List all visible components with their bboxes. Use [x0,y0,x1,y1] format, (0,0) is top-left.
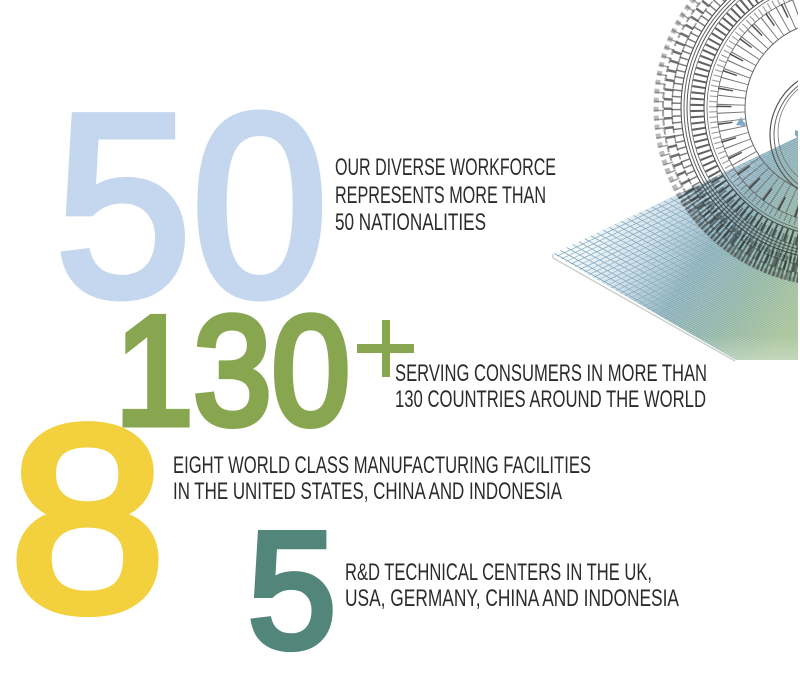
stat: 130+ countries [115,284,707,457]
description: workforce: 50 NATIONALITIES [335,209,486,236]
description: workforce: REPRESENTS MORE THAN [335,182,546,209]
number 8: 8 [9,371,166,666]
tire wireframe [656,0,800,284]
number 130: 130 [115,284,350,457]
description: workforce [335,154,556,236]
number 5: 5 [248,498,336,679]
description: workforce: OUR DIVERSE WORKFORCE [335,154,556,181]
stat: 50 nationalities [55,61,556,351]
mesh plane [553,137,798,361]
description: facilities: EIGHT WORLD CLASS MANUFACTURING FACILITIES [173,452,591,479]
stat: 8 facilities [9,371,591,666]
description: countries [395,360,707,413]
number 50: 50 [55,61,328,351]
illustration: tire on mesh plane [553,0,800,361]
description: R&D centers: USA, GERMANY, CHINA AND INDONESIA [345,585,679,612]
plus sign [357,320,414,377]
paint splashes [736,117,798,138]
description: R&D centers [345,559,679,612]
description: facilities [173,452,591,505]
description: facilities: IN THE UNITED STATES, CHINA AND INDONESIA [173,478,562,505]
stat: 5 technical centers [248,498,679,679]
description: R&D centers: R&D TECHNICAL CENTERS IN THE UK, [345,559,652,586]
